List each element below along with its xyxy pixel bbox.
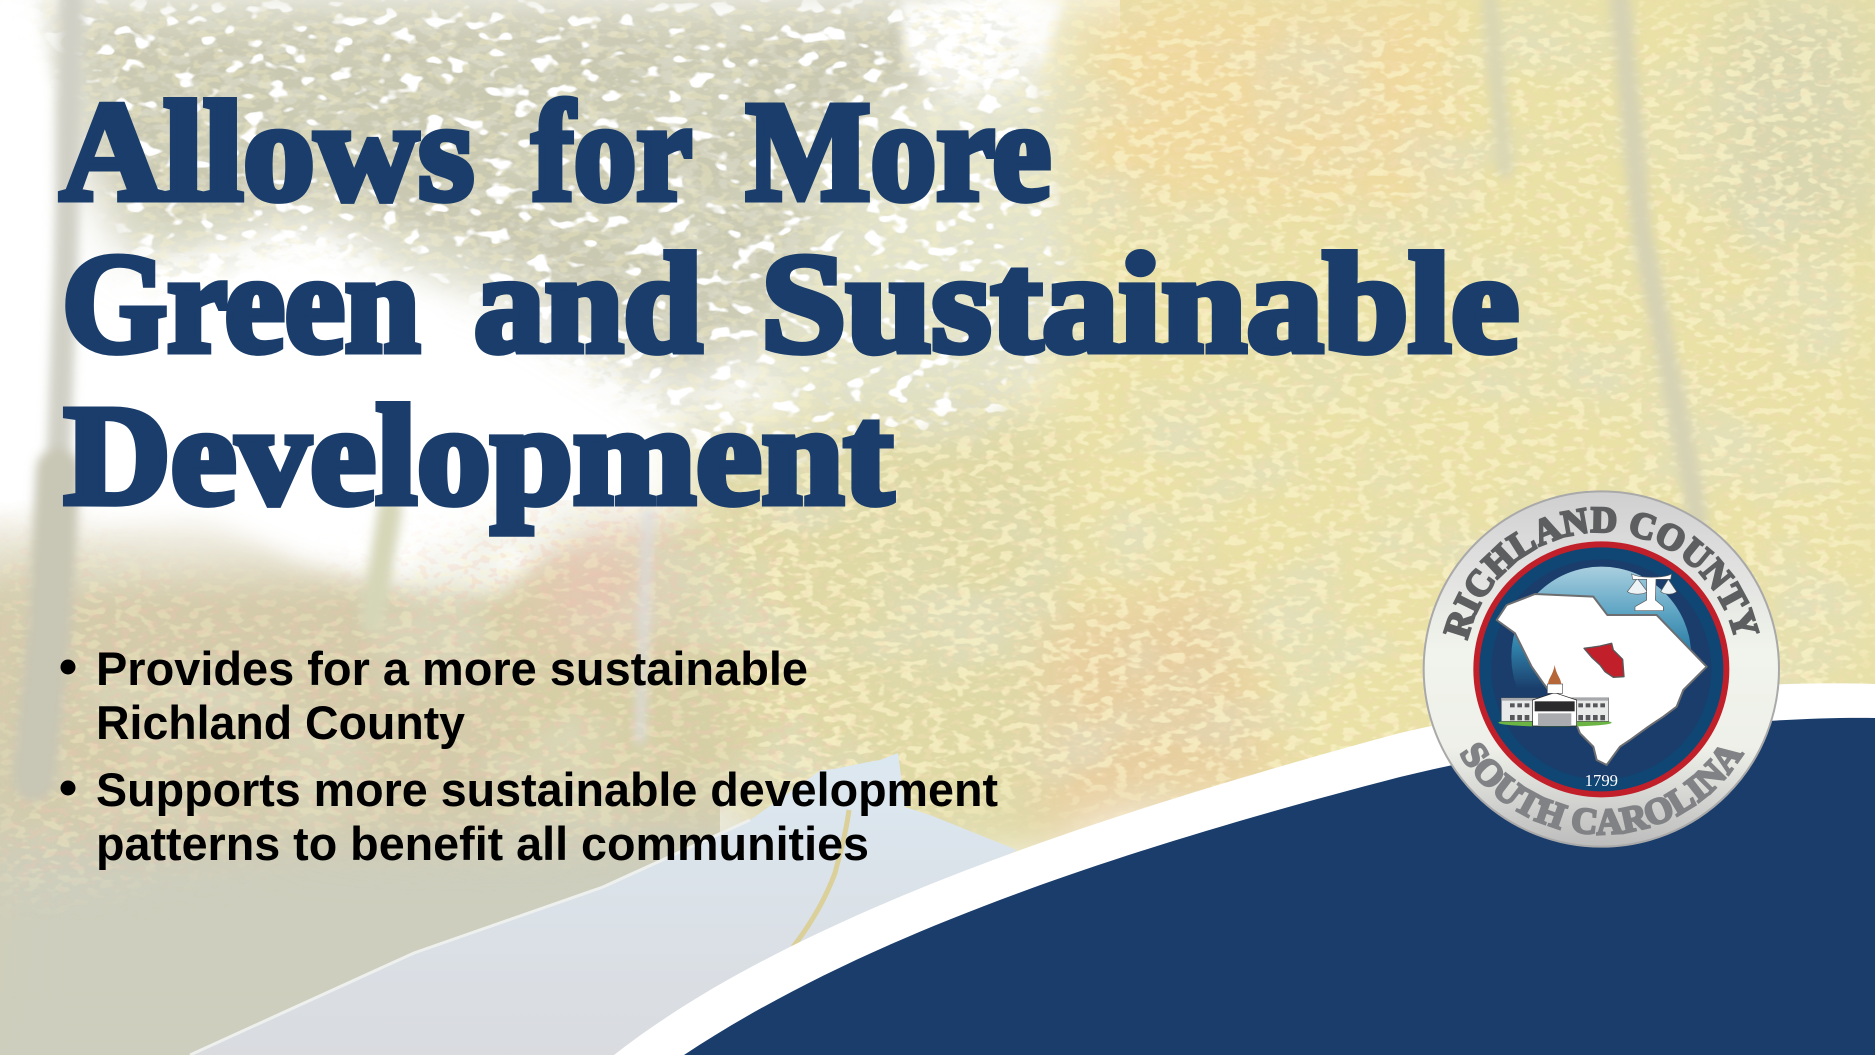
- title: Development: [64, 376, 893, 534]
- title: for: [532, 72, 692, 230]
- red ring: [1473, 541, 1729, 797]
- bullet list: Provides for a more sustainable: [96, 642, 808, 695]
- bullet list: Supports more sustainable development: [96, 763, 998, 816]
- bullet list: Richland County: [96, 696, 465, 749]
- icon: scales of justice: [1627, 574, 1677, 611]
- title: and: [474, 224, 702, 382]
- title: More: [746, 72, 1051, 230]
- bullet list: patterns to benefit all communities: [96, 817, 869, 870]
- navy swoosh: [684, 718, 1875, 1055]
- bullet list: [60, 642, 998, 870]
- icon: state house: [1498, 665, 1612, 727]
- foliage texture: [726, 0, 1875, 825]
- map of South Carolina: [1497, 594, 1707, 765]
- glossy blue highlight: [1511, 567, 1691, 747]
- white swoosh band: [614, 683, 1875, 1055]
- sky patches: [0, 0, 1063, 590]
- title: Allows: [60, 72, 474, 230]
- seal text: South Carolina: SOUTH CAROLINA: [1460, 742, 1745, 836]
- county seal: [1422, 490, 1780, 848]
- navy inner disc: [1479, 547, 1723, 791]
- founding year: 1799: [1585, 771, 1618, 790]
- Richland County shape: [1584, 643, 1624, 677]
- seal text: Richland County: RICHLAND COUNTY: [1442, 506, 1760, 641]
- title: Green: [62, 224, 420, 382]
- road: [190, 753, 1017, 1055]
- title: Sustainable: [761, 224, 1519, 382]
- tree trunks: [34, 0, 1710, 780]
- title: [60, 72, 1519, 534]
- seal outer ring: [1424, 491, 1779, 847]
